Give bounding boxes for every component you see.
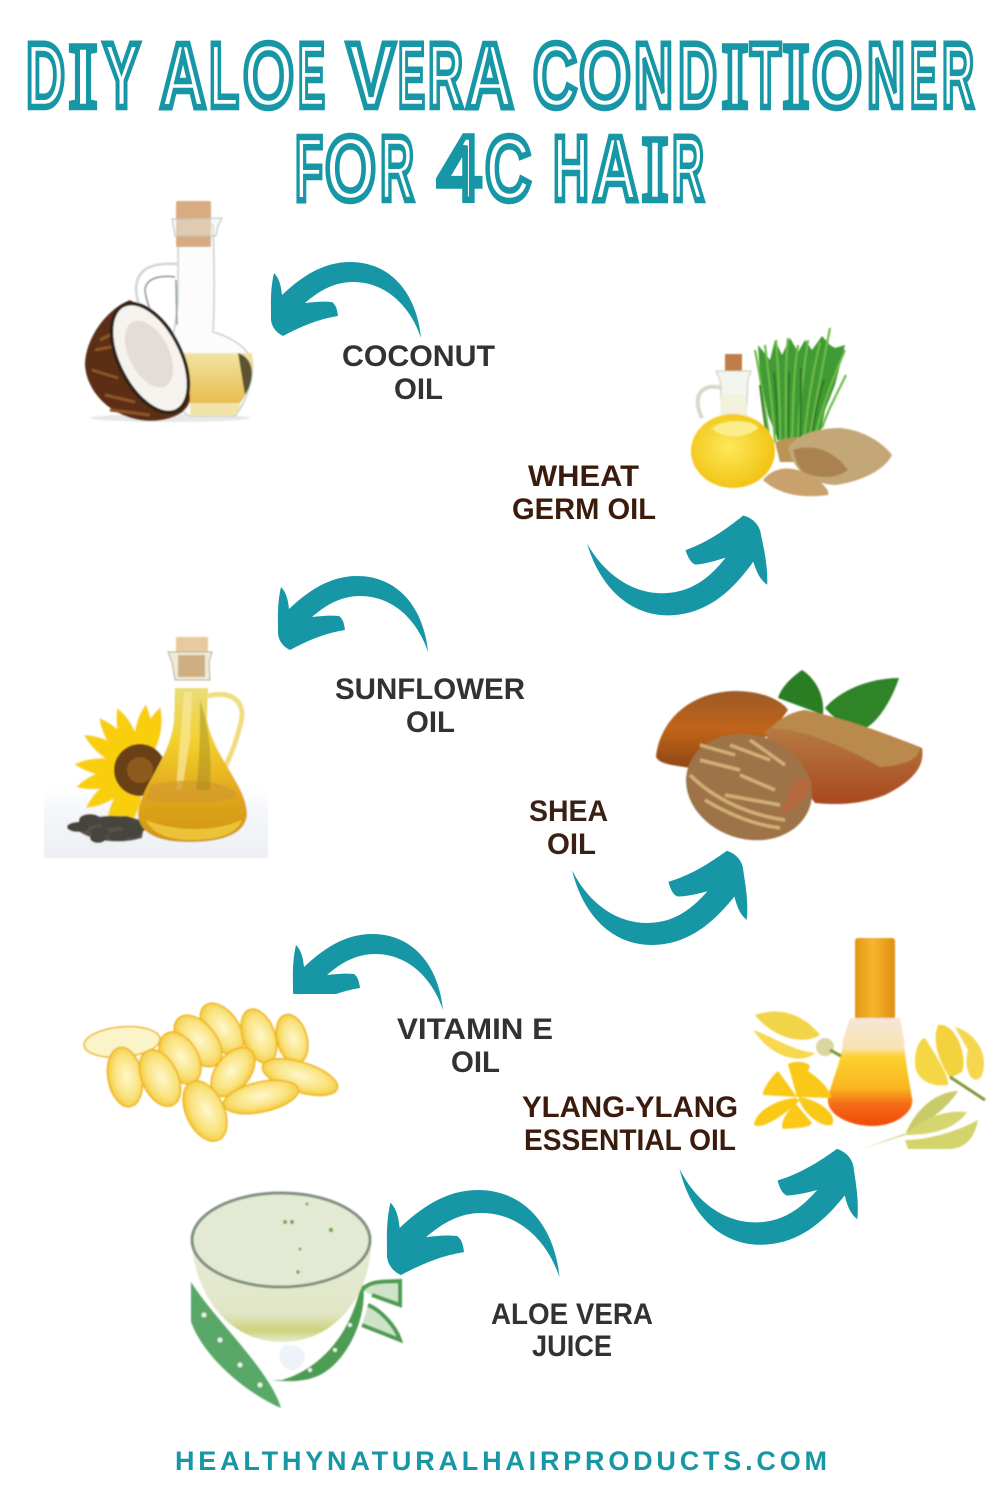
title: D xyxy=(678,25,717,127)
icon: wheat germ oil, grass and sack xyxy=(691,328,892,496)
title: E xyxy=(398,25,425,127)
icon: coconut oil bottle and coconut xyxy=(85,201,253,425)
title: A xyxy=(593,118,638,220)
title: H xyxy=(553,118,589,220)
title: R xyxy=(672,118,704,220)
arrow: shea xyxy=(572,847,752,955)
label: shea oil: SHEA xyxy=(529,795,608,828)
title: D xyxy=(26,25,65,127)
ingredient: ylang-ylang essential oil xyxy=(522,938,985,1255)
title: O xyxy=(812,25,862,127)
arrow: sunflower xyxy=(278,576,428,652)
title: R xyxy=(428,25,463,127)
title: T xyxy=(750,25,781,127)
label: shea oil: OIL xyxy=(547,828,596,861)
title: A xyxy=(160,25,206,127)
title: F xyxy=(295,118,323,220)
arrow: aloe vera xyxy=(387,1190,560,1277)
title: A xyxy=(466,25,512,127)
title: L xyxy=(209,25,239,127)
label: coconut oil: OIL xyxy=(394,373,443,406)
title: R xyxy=(380,118,414,220)
ingredient: aloe vera juice xyxy=(191,1190,653,1408)
label: ylang-ylang essential oil xyxy=(522,1091,738,1157)
arrow: ylang-ylang xyxy=(680,1145,863,1255)
label: shea oil xyxy=(529,795,608,861)
title: N xyxy=(867,25,905,127)
label: wheat germ oil: WHEAT xyxy=(528,460,639,493)
title: I xyxy=(69,25,97,127)
title: E xyxy=(298,25,325,127)
label: coconut oil: COCONUT xyxy=(342,340,495,373)
arrow: coconut xyxy=(271,262,421,338)
title: V xyxy=(347,25,395,127)
label: ylang-ylang essential oil: ESSENTIAL OIL xyxy=(524,1124,736,1157)
label: vitamin E oil: OIL xyxy=(451,1046,500,1079)
icon: sunflower oil bottle xyxy=(44,637,268,858)
icon: shea nuts and leaves xyxy=(656,670,923,856)
label: sunflower oil: SUNFLOWER xyxy=(335,673,525,706)
label: vitamin E oil: VITAMIN E xyxy=(397,1013,553,1046)
title: E xyxy=(910,25,937,127)
ingredient: shea oil xyxy=(529,670,923,955)
title xyxy=(26,25,974,220)
label: aloe vera juice: JUICE xyxy=(532,1330,612,1363)
label: aloe vera juice: ALOE VERA xyxy=(491,1298,653,1331)
label: sunflower oil xyxy=(335,673,525,739)
title: N xyxy=(634,25,673,127)
label: aloe vera juice xyxy=(491,1298,653,1363)
ingredient: vitamin E oil xyxy=(83,934,553,1148)
icon: aloe vera juice bowl xyxy=(191,1193,400,1408)
label: sunflower oil: OIL xyxy=(406,706,455,739)
arrow: vitamin E xyxy=(293,934,443,1010)
title: O xyxy=(325,118,376,220)
footer: website: HEALTHYNATURALHAIRPRODUCTS.COM xyxy=(175,1446,827,1476)
title: I xyxy=(783,25,809,127)
title: O xyxy=(243,25,294,127)
label: vitamin E oil xyxy=(397,1013,553,1079)
title: I xyxy=(722,25,748,127)
arrow: wheat germ xyxy=(587,511,773,629)
title: 4 xyxy=(437,118,482,220)
label: wheat germ oil: GERM OIL xyxy=(512,493,656,526)
icon: vitamin E capsules xyxy=(83,995,342,1148)
title: C xyxy=(533,25,577,127)
label: wheat germ oil xyxy=(512,460,656,526)
label: ylang-ylang essential oil: YLANG-YLANG xyxy=(522,1091,738,1124)
ingredient: sunflower oil xyxy=(44,576,525,858)
label: coconut oil xyxy=(342,340,495,406)
ingredient: coconut oil xyxy=(85,201,495,425)
title: I xyxy=(642,118,668,220)
icon: ylang-ylang perfume bottle and flowers xyxy=(753,938,985,1149)
title: C xyxy=(485,118,531,220)
title: Y xyxy=(103,25,139,127)
ingredient: wheat germ oil xyxy=(512,328,892,629)
title: O xyxy=(579,25,631,127)
